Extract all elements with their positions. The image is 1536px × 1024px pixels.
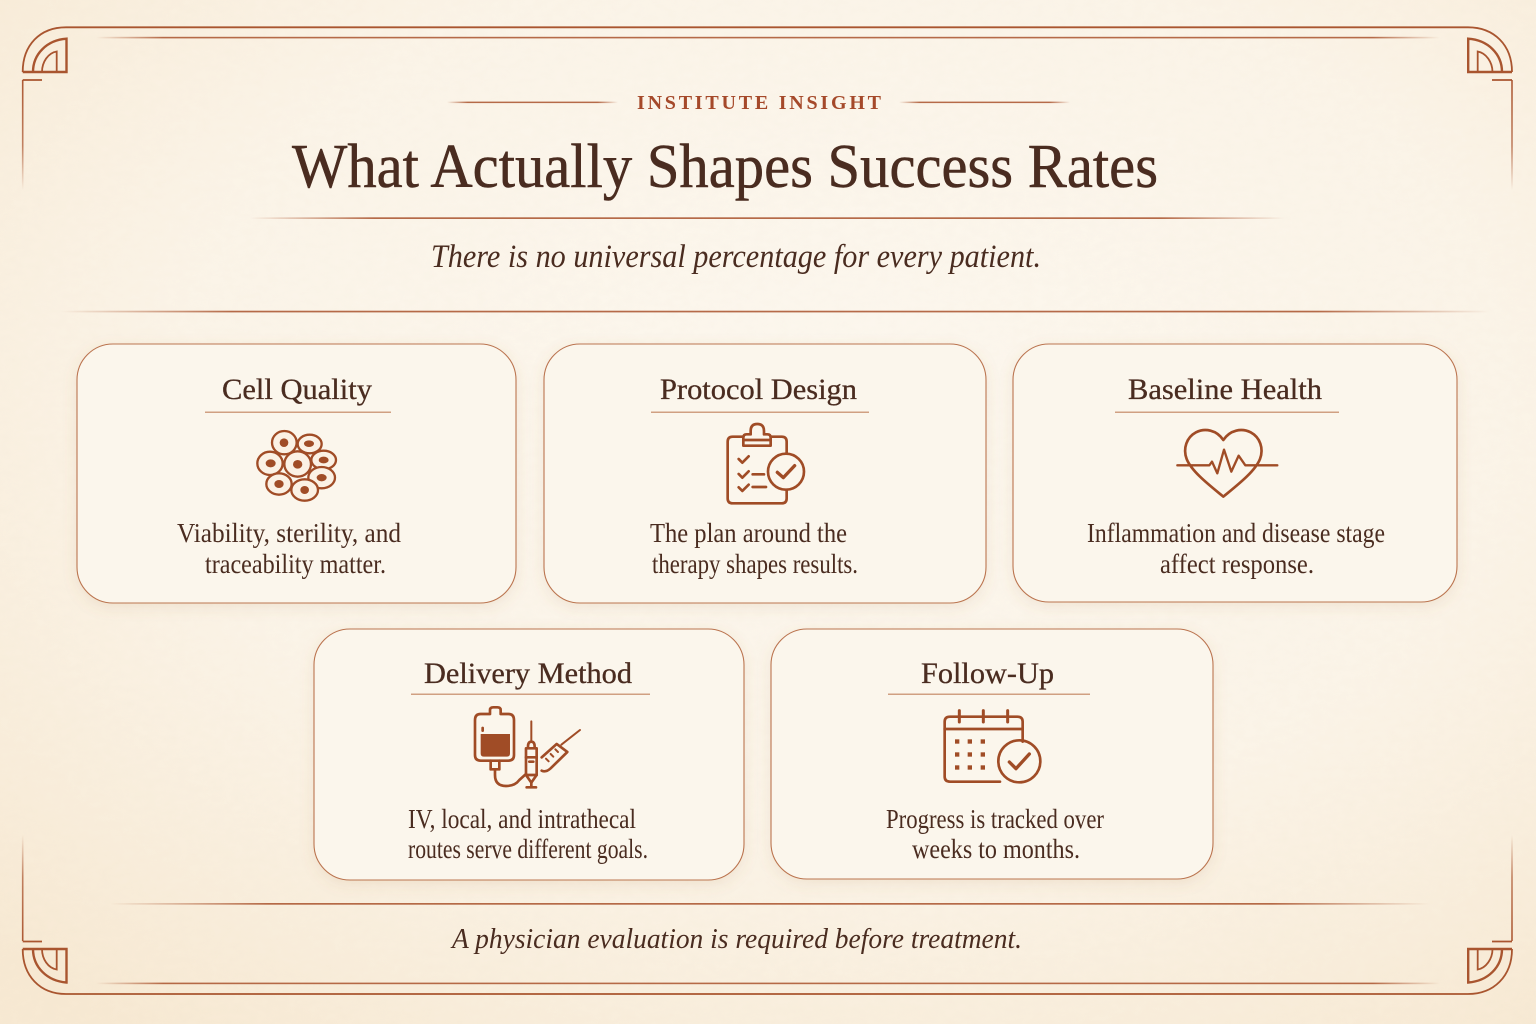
body text: baseline health [1087, 518, 1385, 579]
body text: baseline health: Inflammation and disease stage [1087, 518, 1385, 548]
panel: protocol design [544, 344, 986, 603]
body text: follow-up: Progress is tracked over [886, 804, 1104, 834]
heading: follow-up: Follow-Up [921, 657, 1054, 690]
body text: protocol design: therapy shapes results. [652, 549, 858, 579]
body text: follow-up: weeks to months. [912, 834, 1080, 864]
footer rule [110, 903, 1430, 905]
body text: cell quality: traceability matter. [205, 549, 386, 579]
body text: protocol design [650, 518, 858, 579]
panel: follow-up [771, 629, 1213, 879]
body text: delivery method: IV, local, and intrathecal [408, 804, 636, 834]
icon: iv bag and syringes [475, 707, 580, 787]
eyebrow: institute insight: INSTITUTE INSIGHT [637, 92, 882, 114]
body text: delivery method: routes serve different goals. [408, 834, 648, 864]
body text: follow-up [886, 804, 1104, 864]
heading: cell quality: Cell Quality [222, 373, 372, 406]
title: What Actually Shapes Success Rates [292, 133, 1158, 201]
header divider [60, 311, 1490, 312]
title underline [250, 217, 1285, 219]
icon: cell cluster [257, 431, 336, 501]
icon: clipboard with check [728, 424, 804, 503]
heading: delivery method: Delivery Method [424, 657, 632, 690]
icon: heart with pulse [1177, 430, 1277, 497]
subtitle: There is no universal percentage for every patient. [431, 239, 1041, 275]
body text: protocol design: The plan around the [650, 518, 847, 548]
heading: baseline health: Baseline Health [1128, 373, 1322, 406]
panel: cell quality [77, 344, 516, 603]
body text: cell quality: Viability, sterility, and [177, 518, 401, 548]
body text: delivery method [408, 804, 648, 864]
icon: calendar with check [945, 711, 1040, 782]
body text: baseline health: affect response. [1160, 549, 1314, 579]
panel: baseline health [1013, 344, 1457, 602]
panel: delivery method [314, 629, 744, 880]
heading: protocol design: Protocol Design [660, 373, 857, 406]
footer note: A physician evaluation is required before treatment. [450, 923, 1022, 955]
body text: cell quality [177, 518, 401, 579]
